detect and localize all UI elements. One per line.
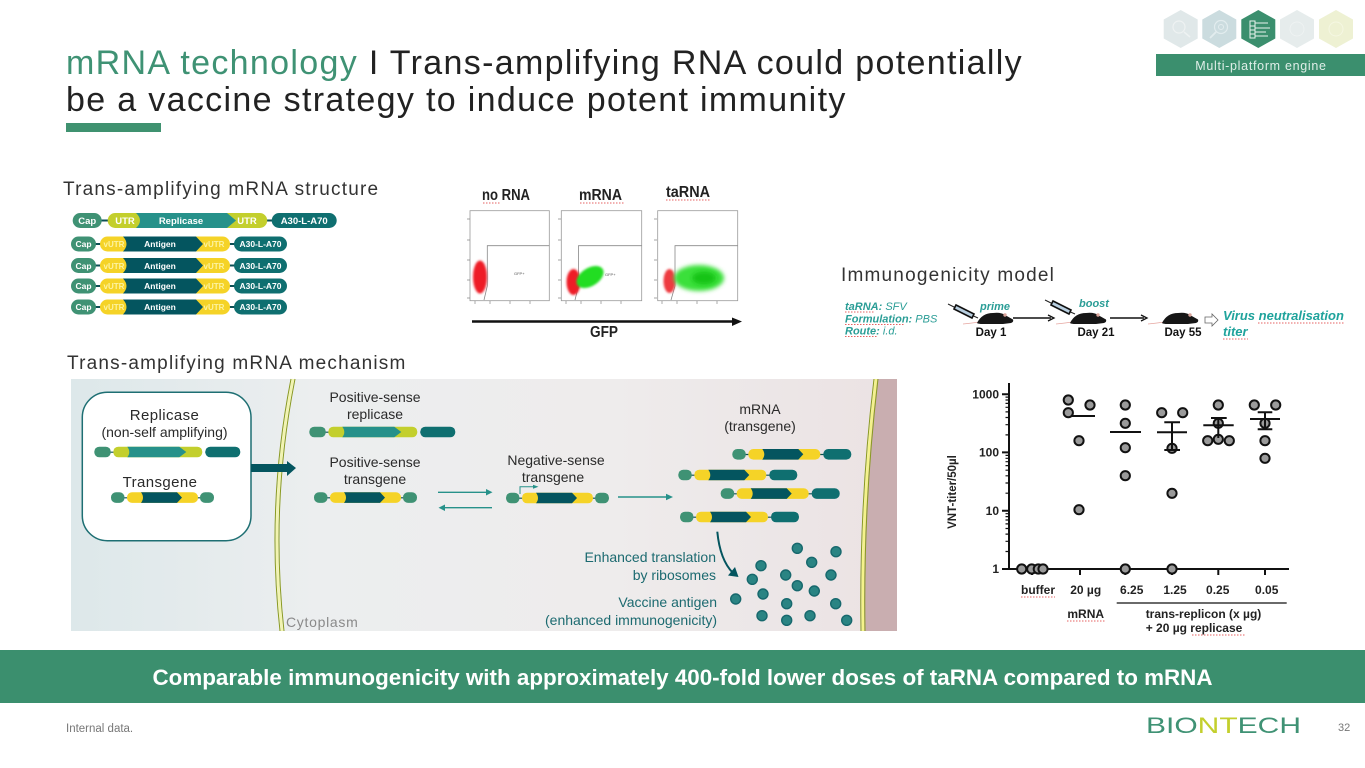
text: translation: Enhanced translation bbox=[584, 549, 716, 565]
transgene construct 3 bbox=[71, 278, 287, 294]
plot: mRNA: GFP+ bbox=[605, 272, 616, 277]
title: be a vaccine strategy to induce potent immunity bbox=[66, 81, 847, 119]
arrow: forward bbox=[438, 489, 492, 496]
text: readout: Virus neutralisation bbox=[1223, 308, 1344, 323]
transgene construct 1: Cap bbox=[75, 239, 92, 249]
transgene construct 4: vUTR bbox=[104, 303, 125, 312]
transgene construct 1: Antigen bbox=[144, 239, 176, 249]
transgene construct 1: vUTR bbox=[104, 240, 125, 249]
chart: VNT titer bbox=[947, 383, 1289, 635]
arrow: day 21 to 55 bbox=[1110, 315, 1147, 321]
diagram: immunisation timeline: prime bbox=[979, 301, 1010, 313]
y axis labels: 1 bbox=[992, 562, 999, 576]
replicase construct bbox=[73, 213, 337, 228]
text: antigen bbox=[545, 594, 717, 628]
text: study parameters bbox=[845, 301, 938, 338]
points: 0.25 bbox=[1203, 400, 1234, 445]
replicase construct: A30-L-A70 bbox=[281, 216, 328, 227]
transgene construct 4 bbox=[71, 300, 287, 314]
icon: hexagon search bbox=[1164, 10, 1198, 48]
x axis labels: 1.25 bbox=[1163, 583, 1187, 597]
arrow: day 1 to 21 bbox=[1013, 315, 1054, 321]
arrow: to mRNA bbox=[618, 494, 673, 500]
transgene construct 4: vUTR bbox=[204, 303, 225, 312]
mRNA transcripts: mRNA bbox=[739, 401, 781, 417]
y axis labels: 1000 bbox=[972, 388, 999, 402]
transgene construct 3: A30-L-A70 bbox=[239, 281, 282, 291]
replicase construct: Cap bbox=[78, 216, 96, 227]
heading: mechanism: Trans-amplifying mRNA mechanism bbox=[67, 353, 407, 374]
negative-sense transgene: transgene bbox=[522, 469, 584, 485]
transgene construct 3: vUTR bbox=[204, 282, 225, 291]
transgene construct 1 bbox=[71, 236, 287, 252]
arrow: outlined bbox=[1205, 314, 1218, 326]
diagram: immunisation timeline: Day 55 bbox=[1164, 327, 1202, 339]
antigen particles bbox=[731, 543, 852, 625]
transgene construct 2: Antigen bbox=[144, 261, 176, 271]
text: readout: titer bbox=[1223, 324, 1248, 339]
label: cytoplasm: Cytoplasm bbox=[286, 614, 358, 630]
negative-sense transgene: Negative-sense bbox=[507, 452, 605, 468]
plot: mRNA bbox=[558, 187, 642, 304]
text: study parameters: taRNA: SFV bbox=[845, 301, 908, 313]
x axis labels: mRNA bbox=[1067, 607, 1104, 621]
title bbox=[66, 44, 1023, 119]
y axis title: VNT-titer/50µl bbox=[947, 455, 959, 529]
transgene construct 4: Cap bbox=[75, 302, 92, 312]
negative-sense transgene bbox=[506, 452, 609, 503]
text: translation bbox=[584, 549, 716, 583]
diagram: immunisation timeline: Day 1 bbox=[976, 327, 1007, 339]
diagram: mRNA structure bbox=[71, 213, 337, 314]
title accent bar bbox=[66, 123, 161, 132]
transgene construct 3: vUTR bbox=[104, 282, 125, 291]
arrow: reverse bbox=[438, 504, 492, 511]
points: 6.25 bbox=[1110, 400, 1141, 574]
text: translation: by ribosomes bbox=[633, 567, 716, 583]
arrow: GFP axis bbox=[472, 318, 742, 326]
heading: structure: Trans-amplifying mRNA structure bbox=[63, 179, 379, 200]
y axis labels: 10 bbox=[986, 504, 999, 518]
x axis labels: 0.25 bbox=[1206, 583, 1230, 597]
text: readout bbox=[1223, 308, 1344, 339]
icon: mouse day 1 bbox=[963, 313, 1013, 324]
arrow: translation bbox=[717, 532, 738, 577]
transgene construct 2: vUTR bbox=[204, 262, 225, 271]
transgene construct 2 bbox=[71, 258, 287, 273]
icon: mouse day 21 bbox=[1056, 313, 1106, 324]
icon: syringe prime bbox=[948, 304, 978, 318]
points: 0.05 bbox=[1250, 400, 1280, 463]
chart: flow cytometry GFP bbox=[467, 184, 742, 341]
plot: taRNA bbox=[654, 184, 738, 304]
points: mRNA 20 µg bbox=[1064, 395, 1095, 514]
text: antigen: Vaccine antigen bbox=[618, 594, 717, 610]
panel: mechanism bbox=[71, 379, 897, 631]
points: buffer bbox=[1017, 564, 1048, 574]
transgene construct 1: vUTR bbox=[204, 240, 225, 249]
logo: BIO NT ECH bbox=[1146, 713, 1301, 738]
transgene construct 3: Cap bbox=[75, 281, 92, 291]
callout: delivered RNA box: (non-self amplifying) bbox=[101, 424, 228, 440]
positive-sense replicase bbox=[309, 389, 455, 437]
y axis labels bbox=[972, 388, 999, 576]
page number: 32 bbox=[1338, 722, 1350, 734]
transgene construct 3: Antigen bbox=[144, 281, 176, 291]
positive-sense transgene bbox=[314, 454, 421, 503]
transgene construct 2: A30-L-A70 bbox=[239, 261, 282, 271]
callout: delivered RNA box bbox=[82, 392, 251, 541]
x axis labels: buffer bbox=[1021, 583, 1055, 597]
callout: delivered RNA box: Replicase bbox=[130, 407, 199, 424]
x axis labels: 20 µg bbox=[1070, 583, 1101, 597]
callout: delivered RNA box: Transgene bbox=[123, 474, 197, 491]
icon: syringe boost bbox=[1045, 300, 1075, 314]
x axis labels: 6.25 bbox=[1120, 583, 1144, 597]
icon: mouse day 55 bbox=[1148, 313, 1198, 324]
transgene construct 2: Cap bbox=[75, 261, 92, 271]
transgene construct 1: A30-L-A70 bbox=[239, 239, 282, 249]
chart: flow cytometry GFP: GFP bbox=[590, 324, 618, 341]
text: study parameters: Route: i.d. bbox=[845, 326, 898, 338]
title: mRNA technology I Trans-amplifying RNA could potentially bbox=[66, 44, 1023, 82]
mRNA transcripts bbox=[678, 401, 851, 522]
replicase construct: UTR bbox=[237, 216, 257, 227]
text: antigen: (enhanced immunogenicity) bbox=[545, 612, 717, 628]
replicase construct: Replicase bbox=[159, 216, 203, 227]
section tag bbox=[1156, 54, 1365, 76]
replicase construct: UTR bbox=[115, 216, 135, 227]
mRNA transcripts: (transgene) bbox=[724, 418, 796, 434]
icon: hexagon target bbox=[1202, 10, 1236, 48]
x axis labels: trans-replicon (x µg) bbox=[1146, 607, 1261, 621]
positive-sense replicase: Positive-sense bbox=[329, 389, 421, 405]
plot: no RNA: GFP+ bbox=[514, 271, 525, 276]
positive-sense replicase: replicase bbox=[347, 406, 403, 422]
section navigator: hexagons bbox=[1164, 10, 1353, 48]
plot: no RNA: no RNA bbox=[482, 187, 530, 204]
transgene construct 2: vUTR bbox=[104, 262, 125, 271]
heading: immunogenicity model: Immunogenicity model bbox=[841, 265, 1055, 286]
arrow: into cell bbox=[251, 461, 296, 476]
positive-sense transgene: transgene bbox=[344, 471, 406, 487]
axes bbox=[1002, 383, 1289, 575]
cell membranes bbox=[275, 379, 878, 631]
section tag: Multi-platform engine bbox=[1195, 59, 1327, 73]
conclusion banner: Comparable immunogenicity with approximately 400-fold lower doses of taRNA compared to mRNA bbox=[152, 665, 1213, 690]
x axis labels bbox=[1021, 583, 1287, 635]
points: 1.25 bbox=[1157, 408, 1187, 574]
x axis labels: + 20 µg replicase bbox=[1146, 621, 1243, 635]
plot: no RNA bbox=[467, 187, 549, 304]
icon: hexagon yellow bbox=[1319, 10, 1353, 48]
positive-sense transgene: Positive-sense bbox=[329, 454, 421, 470]
icon: hexagon multi-platform bbox=[1241, 10, 1275, 48]
footnote: Internal data. bbox=[66, 723, 133, 735]
diagram: immunisation timeline: Day 21 bbox=[1077, 327, 1115, 339]
plot: mRNA: mRNA bbox=[579, 187, 622, 204]
diagram: immunisation timeline: boost bbox=[1079, 298, 1110, 310]
text: study parameters: Formulation: PBS bbox=[845, 314, 938, 326]
plot: taRNA: taRNA bbox=[666, 184, 710, 201]
diagram: immunisation timeline bbox=[845, 298, 1344, 339]
icon: hexagon pale bbox=[1280, 10, 1314, 48]
transgene construct 4: A30-L-A70 bbox=[239, 302, 282, 312]
y axis labels: 100 bbox=[979, 446, 999, 460]
transgene construct 4: Antigen bbox=[144, 302, 176, 312]
x axis labels: 0.05 bbox=[1255, 583, 1279, 597]
conclusion banner bbox=[0, 650, 1365, 703]
